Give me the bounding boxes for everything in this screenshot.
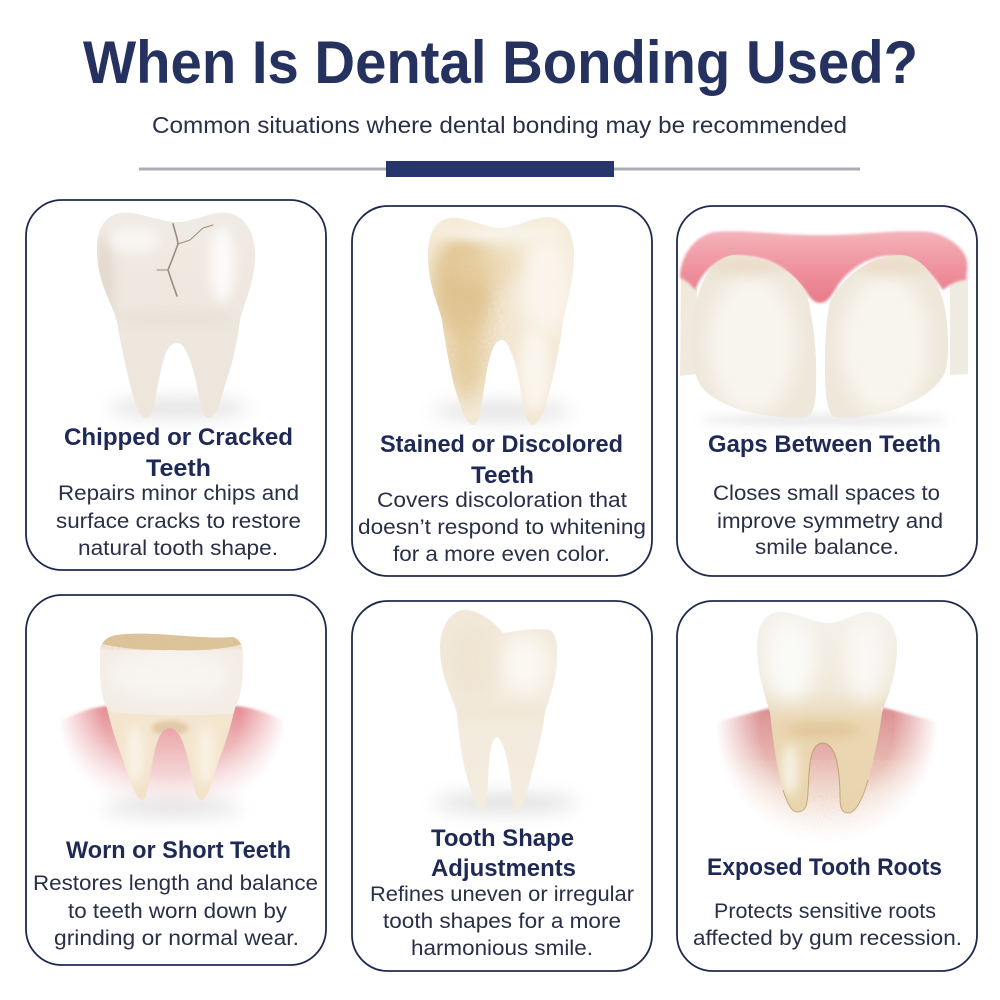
heading: Exposed Tooth Roots: [707, 854, 942, 881]
panel: tooth shape adjustments: [352, 601, 652, 971]
description: natural tooth shape.: [78, 537, 278, 560]
description: harmonious smile.: [411, 937, 593, 960]
heading: [64, 424, 293, 482]
header divider: [139, 161, 860, 177]
description: tooth shapes for a more: [383, 910, 621, 933]
root outline: [783, 743, 868, 813]
icon: worn tooth in gum: [58, 628, 286, 820]
description: smile balance.: [755, 536, 899, 559]
heading: Chipped or Cracked: [64, 424, 293, 451]
description: Repairs minor chips and: [58, 482, 299, 505]
heading: [380, 431, 623, 489]
panel: exposed tooth roots: [677, 601, 977, 971]
description: Closes small spaces to: [713, 482, 940, 505]
heading: Adjustments: [431, 855, 576, 882]
heading: [431, 825, 576, 882]
description: [370, 883, 634, 960]
description: doesn’t respond to whitening: [358, 516, 646, 539]
icon: irregular tooth: [438, 610, 572, 818]
icon: stained tooth: [428, 217, 574, 426]
heading: Gaps Between Teeth: [708, 431, 941, 458]
icon: tooth with exposed roots: [716, 608, 938, 845]
subtitle: Common situations where dental bonding may be recommended: [152, 112, 847, 138]
description: Protects sensitive roots: [714, 900, 936, 923]
crack lines: [157, 224, 213, 296]
description: [33, 872, 318, 950]
title: When Is Dental Bonding Used?: [83, 29, 918, 96]
description: [56, 482, 301, 560]
panel: chipped or cracked teeth: [26, 200, 326, 570]
description: improve symmetry and: [717, 510, 943, 533]
icon: cracked tooth: [97, 212, 255, 423]
heading: Stained or Discolored: [380, 431, 623, 458]
description: Covers discoloration that: [377, 489, 627, 512]
heading: Worn or Short Teeth: [66, 837, 291, 864]
heading: Teeth: [146, 455, 211, 482]
description: to teeth worn down by: [68, 900, 288, 923]
description: affected by gum recession.: [693, 927, 962, 950]
description: [358, 489, 646, 566]
panel: worn or short teeth: [26, 595, 326, 965]
heading: Tooth Shape: [431, 825, 574, 852]
description: Restores length and balance: [33, 872, 318, 895]
description: surface cracks to restore: [56, 510, 301, 533]
description: [713, 482, 943, 559]
panel: gaps between teeth: [677, 206, 977, 576]
description: Refines uneven or irregular: [370, 883, 634, 906]
description: for a more even color.: [393, 543, 610, 566]
description: [693, 900, 962, 950]
panel: stained or discolored teeth: [352, 206, 652, 576]
icon: front teeth with gap: [680, 231, 968, 425]
description: grinding or normal wear.: [54, 927, 299, 950]
heading: Teeth: [471, 462, 534, 489]
